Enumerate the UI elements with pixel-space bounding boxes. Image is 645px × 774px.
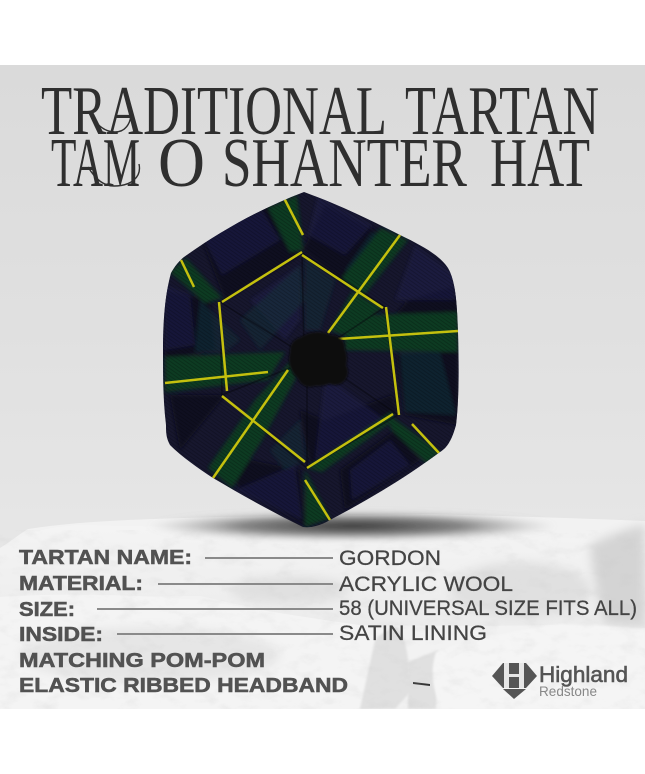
spec: size xyxy=(19,597,637,621)
spec: inside: SATIN LINING xyxy=(339,622,487,645)
spec: size: 58 (UNIVERSAL SIZE FITS ALL) xyxy=(339,597,637,620)
green bands xyxy=(165,195,458,527)
spec: material: ACRYLIC WOOL xyxy=(339,573,513,596)
stone pedestal xyxy=(0,514,645,709)
spec: material xyxy=(19,573,513,596)
spec: inside: INSIDE: xyxy=(19,624,103,646)
navy checks xyxy=(165,195,455,520)
spec: inside xyxy=(19,622,487,646)
hat shadow xyxy=(147,511,557,541)
pom-pom xyxy=(289,332,348,387)
specification list xyxy=(19,547,637,697)
title line 2: HAT xyxy=(490,125,590,202)
seam shading xyxy=(220,253,398,468)
brand logo xyxy=(492,662,628,699)
spec: size: SIZE: xyxy=(19,599,75,621)
icon: hexagon mark xyxy=(492,663,537,699)
title line 2: O xyxy=(158,125,205,202)
blue-green overlays xyxy=(195,232,456,470)
feature: pom-pom: MATCHING POM-POM xyxy=(19,650,265,672)
title line 1: TRADITIONAL xyxy=(41,73,387,150)
sub-wordmark: Redstone xyxy=(539,683,597,699)
dark checks xyxy=(165,200,458,525)
title line 2: SHANTER xyxy=(222,125,467,202)
hat base cloth xyxy=(155,185,465,535)
twill texture xyxy=(155,185,465,535)
tartan hat xyxy=(155,185,465,535)
yellow stripes xyxy=(165,198,458,520)
spec: tartan name xyxy=(19,547,441,570)
title xyxy=(41,73,599,202)
title line 2 xyxy=(51,125,590,202)
feature: headband: ELASTIC RIBBED HEADBAND xyxy=(19,675,348,697)
title line 2: TAM xyxy=(51,125,140,202)
spec: tartan name: TARTAN NAME: xyxy=(19,547,192,569)
wordmark: Highland xyxy=(539,662,628,687)
spec: tartan name: GORDON xyxy=(339,547,441,570)
spec: material: MATERIAL: xyxy=(19,573,143,595)
